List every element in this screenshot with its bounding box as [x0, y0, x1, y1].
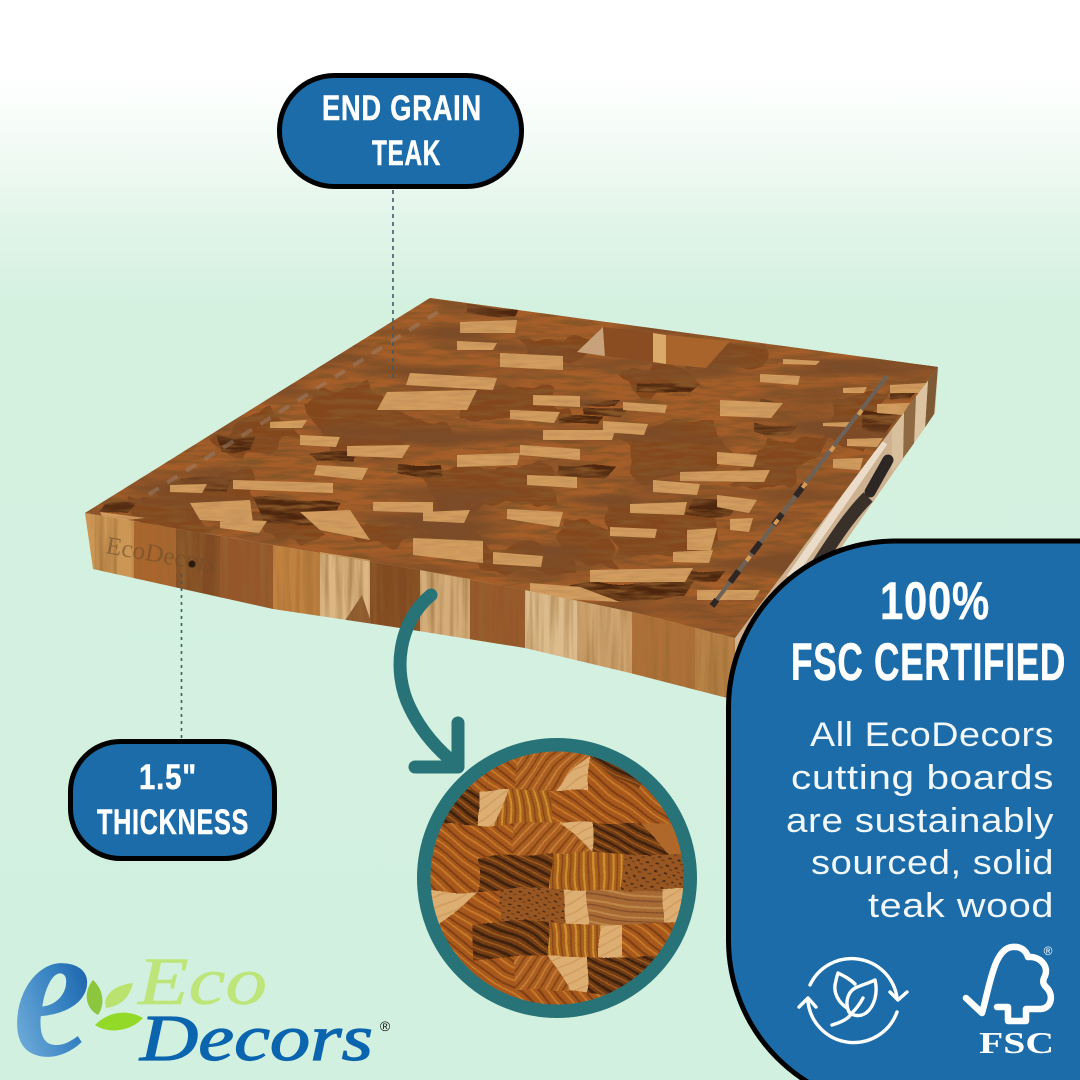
handle recess — [577, 327, 730, 368]
dark band overlay — [80, 290, 950, 650]
callout: thickness: THICKNESS — [97, 803, 249, 842]
board top surface — [80, 290, 950, 650]
mid-tone swirl patches — [130, 335, 890, 575]
callout: thickness — [70, 742, 274, 858]
panel heading — [791, 572, 1066, 692]
front edge highlight caps — [86, 513, 574, 600]
panel body text — [786, 716, 1054, 925]
grain overlay — [80, 290, 950, 650]
dark blocks — [97, 307, 917, 600]
logo: EcoDecors: ® — [380, 1018, 391, 1034]
juice groove right — [712, 376, 887, 606]
panel: FSC certified — [728, 541, 1080, 1080]
board front face — [80, 505, 740, 705]
logo: EcoDecors: Decors — [139, 1002, 373, 1075]
end grain close-up circle — [410, 740, 701, 1022]
dotted leader: thickness — [180, 574, 182, 740]
callout: thickness: 1.5" — [139, 758, 197, 797]
juice groove left — [140, 312, 438, 500]
engraved logo on board: EcoDecors — [104, 532, 219, 578]
cutting board photo — [80, 290, 950, 710]
icon: recycling leaf — [799, 959, 907, 1043]
callout: end grain teak: END GRAIN — [322, 89, 482, 128]
logo leaves — [87, 980, 143, 1030]
icon: FSC tree logo: FSC — [979, 1025, 1054, 1060]
panel body text: sourced, solid — [811, 844, 1054, 882]
panel body text: cutting boards — [791, 759, 1054, 797]
panel heading: 100% — [880, 572, 990, 631]
light blocks — [100, 320, 927, 605]
callout: end grain teak — [280, 76, 522, 186]
curved arrow — [400, 595, 458, 767]
logo: EcoDecors: Eco — [137, 943, 267, 1019]
board side face with handle — [735, 368, 938, 654]
callout: end grain teak: TEAK — [372, 134, 441, 173]
panel body text: are sustainably — [786, 802, 1054, 840]
panel body text: All EcoDecors — [810, 716, 1054, 754]
dotted leader: end grain teak — [392, 190, 394, 379]
icon: FSC tree logo — [966, 944, 1054, 1060]
panel body text: teak wood — [868, 887, 1054, 925]
logo: EcoDecors — [13, 882, 391, 1080]
icon: FSC tree logo: ® — [1044, 944, 1053, 958]
